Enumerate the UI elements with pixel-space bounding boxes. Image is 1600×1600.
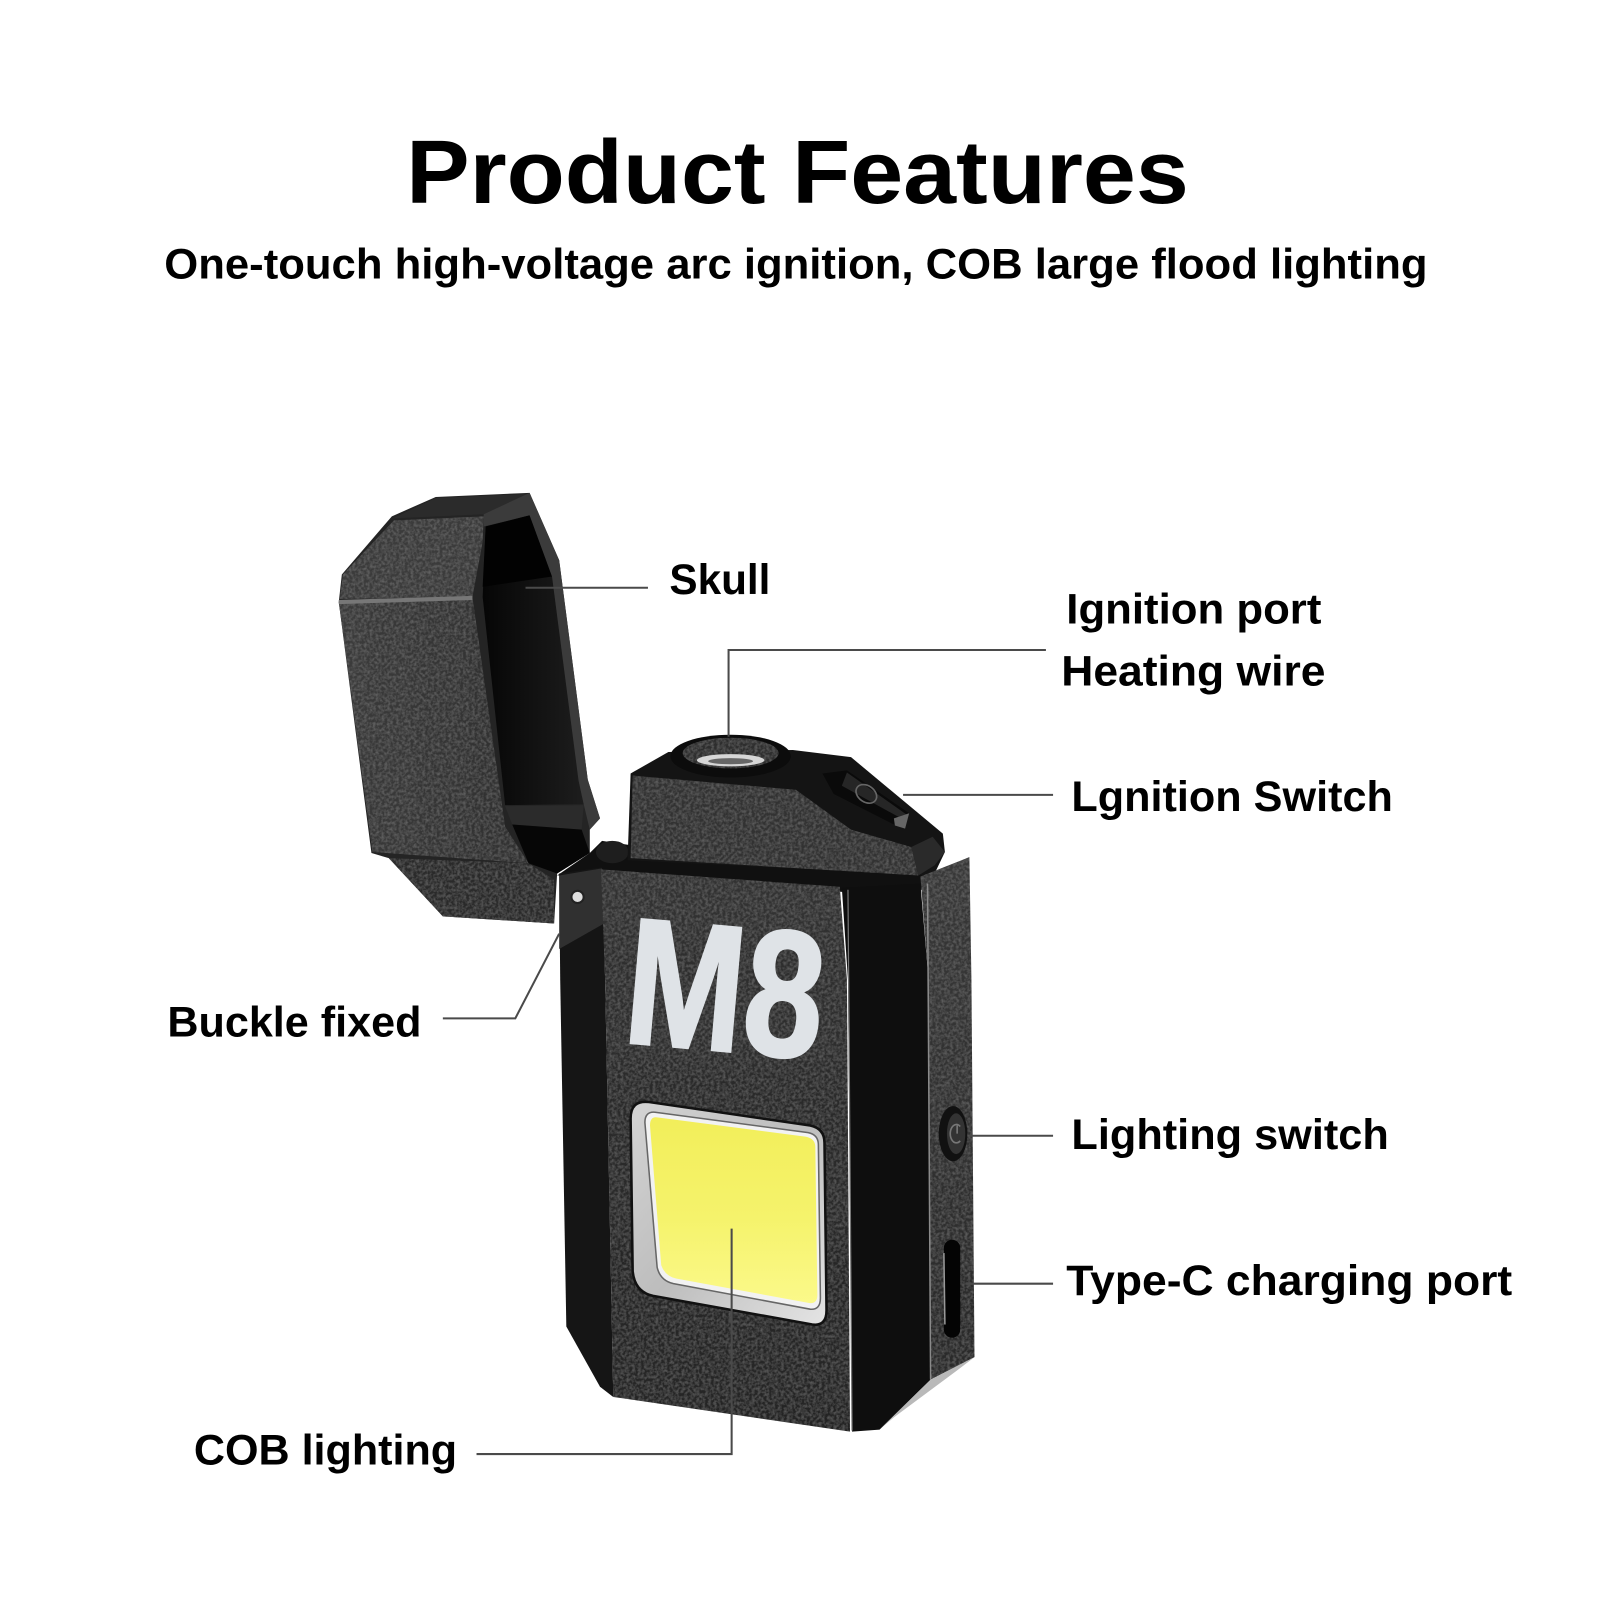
ignition head: [628, 750, 945, 876]
leader: Type-C charging port: [965, 1283, 1053, 1285]
subtitle: One-touch high-voltage arc ignition, COB large flood lighting: [164, 241, 1428, 289]
open lid: [339, 493, 600, 923]
body right face: [848, 857, 974, 1431]
leader: COB lighting: [477, 1229, 732, 1454]
lighter illustration: [339, 493, 974, 1432]
ignition switch: [822, 770, 909, 829]
type-c port: [944, 1240, 960, 1338]
label: Lgnition Switch: Lgnition Switch: [1071, 773, 1393, 821]
body shadow side: [842, 884, 931, 1432]
leader: Lgnition Switch: [903, 794, 1053, 796]
hinge bump: [596, 841, 629, 863]
label: Type-C charging port: Type-C charging port: [1066, 1257, 1512, 1305]
leader: Lighting switch: [969, 1135, 1053, 1137]
label: Ignition port and Heating wire: Ignition port: [1066, 585, 1321, 633]
label: Buckle fixed: Buckle fixed: [167, 999, 421, 1047]
label: Lighting switch: Lighting switch: [1071, 1111, 1389, 1159]
hinge and head base underlay: [557, 841, 969, 892]
body front face: [601, 869, 850, 1432]
label: Skull: Skull: [669, 556, 770, 604]
label: COB lighting: COB lighting: [194, 1426, 457, 1474]
leader: Ignition port: [729, 650, 1046, 737]
label: Ignition port and Heating wire: Heating wire: [1061, 648, 1326, 696]
hinge pin: [559, 868, 604, 949]
body left hinge strip: [559, 867, 613, 1397]
leader: Buckle fixed: [443, 934, 559, 1018]
COB lamp: [631, 1102, 827, 1325]
title: Product Features: [406, 123, 1189, 223]
lighting switch button: [939, 1106, 967, 1161]
label: Ignition port and Heating wire: [1061, 585, 1326, 696]
M8 printed mark: M8: [618, 880, 833, 1098]
ignition port ring: [670, 735, 791, 778]
leader: Skull: [526, 587, 648, 589]
